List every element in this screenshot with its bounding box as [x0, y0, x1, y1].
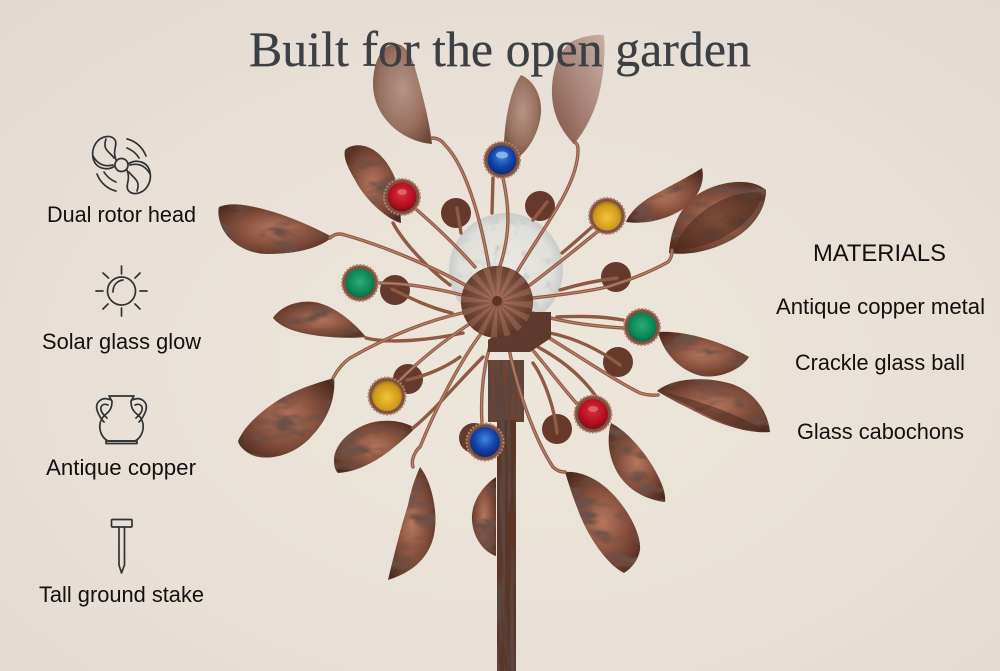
cup: far left [218, 204, 332, 254]
crackle glass ball [449, 213, 563, 327]
gem: blue top [484, 142, 520, 178]
materials heading: MATERIALS [813, 240, 946, 267]
materials list [776, 240, 985, 444]
feature: solar glass glow [42, 266, 201, 354]
gem: blue lower [466, 424, 504, 460]
ground stake [488, 360, 524, 671]
central hub [461, 266, 551, 352]
cup: top right [552, 35, 605, 144]
garden spinner product illustration [218, 35, 770, 671]
cup: lower right [609, 423, 665, 502]
label: Solar glass glow [42, 329, 201, 354]
gem: red lower [574, 396, 612, 432]
cup: bottom left [388, 467, 435, 580]
feature: dual rotor head [47, 136, 196, 227]
icon: vase [97, 396, 146, 444]
feature: antique copper [46, 396, 196, 480]
icon: sun [96, 266, 147, 316]
material: glass cabochons: Glass cabochons [797, 419, 964, 444]
label: Tall ground stake [39, 582, 204, 607]
cup: upper right [626, 168, 703, 223]
cup: top center [504, 75, 541, 156]
cup: upper left [345, 145, 401, 223]
material: crackle glass ball: Crackle glass ball [795, 350, 965, 375]
cup: mid left [273, 302, 366, 338]
wire arms [330, 138, 672, 472]
bronze discs [380, 191, 633, 453]
icon: stake [112, 520, 132, 573]
cup: bottom right [565, 472, 640, 573]
feature: tall ground stake [39, 520, 204, 607]
title: Built for the open garden [249, 21, 751, 77]
cup: mid right [658, 332, 749, 377]
cup: big right lower [657, 379, 770, 432]
gem: green right [624, 309, 660, 345]
cups [218, 35, 770, 580]
icon: rotor fan [93, 136, 150, 194]
gem: red left [384, 179, 420, 215]
gem: yellow lower [368, 378, 406, 414]
cup: big left lower [238, 378, 334, 458]
cup: lower left [334, 421, 415, 473]
cup: top left [373, 44, 432, 144]
label: Antique copper [46, 455, 196, 480]
cup behind stake [472, 477, 496, 556]
gem: yellow right [589, 198, 625, 234]
material: antique copper metal: Antique copper metal [776, 294, 985, 319]
gem: green left [342, 265, 378, 301]
label: Dual rotor head [47, 202, 196, 227]
cup: big right [669, 182, 766, 254]
